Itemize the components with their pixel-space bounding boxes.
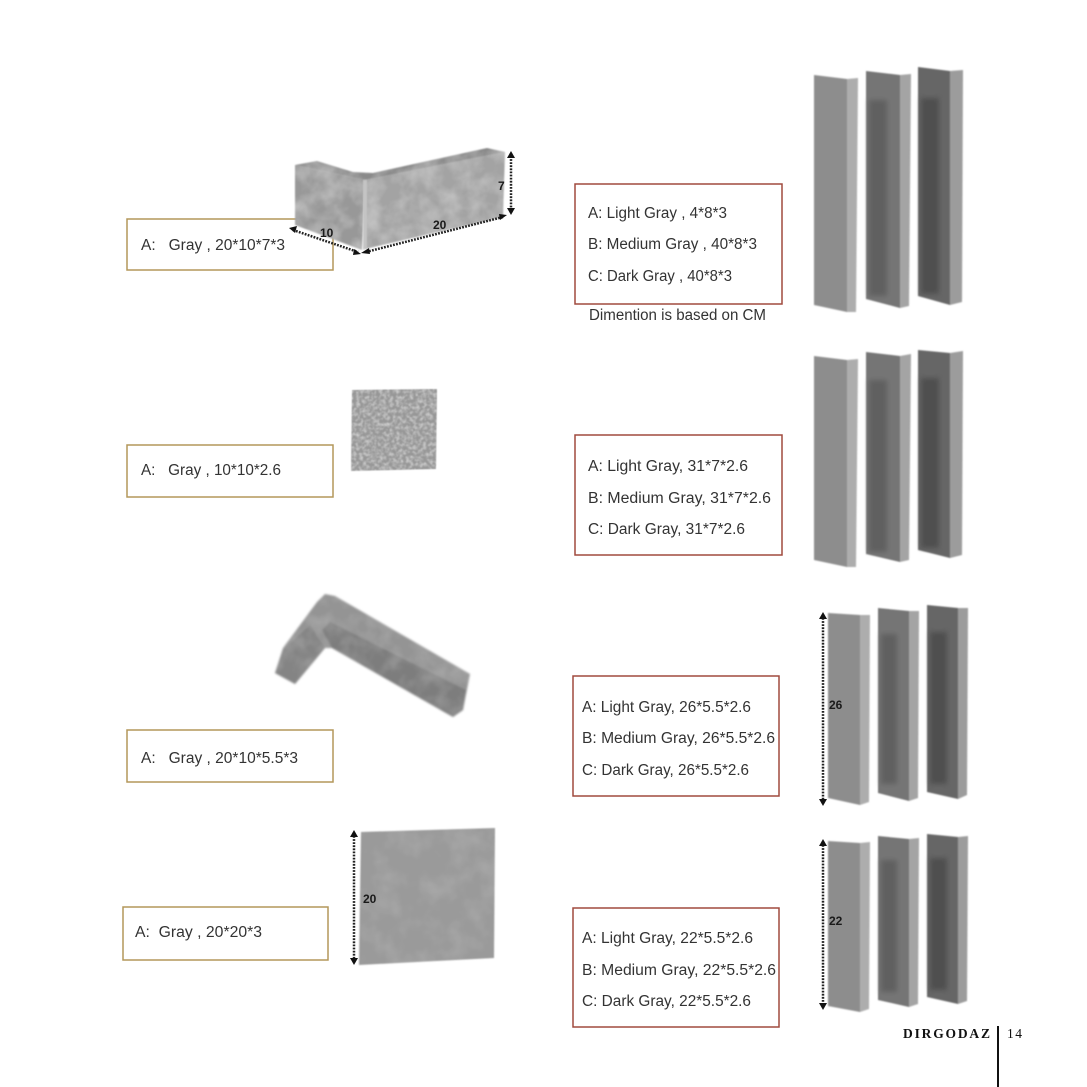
product photo: three bars 26cm with height marker: [819, 605, 968, 806]
label box: bars light medium dark 22*5.5*2.6: C: Dark Gray, 22*5.5*2.6: [582, 993, 751, 1010]
label box: bars light medium dark 26*5.5*2.6: C: Dark Gray, 26*5.5*2.6: [582, 762, 749, 779]
product photo: three bars 22cm with height marker: 22: [829, 914, 843, 928]
label box: gray tile 10*10*2.6: A: Gray , 10*10*2.6: [141, 462, 281, 479]
footer: brand name and page number: 14: [1007, 1026, 1022, 1041]
product photo: square tile 20cm with height marker: 20: [363, 892, 377, 906]
product photo: three bars 31cm: [814, 350, 963, 567]
label box: bars light medium dark 26*5.5*2.6: A: Light Gray, 26*5.5*2.6: [582, 699, 751, 716]
label box: bars light medium dark 26*5.5*2.6: [573, 676, 779, 796]
product photo: angled corner brick: [275, 594, 470, 717]
label box: bars light medium dark 31*7*2.6: A: Light Gray, 31*7*2.6: [588, 458, 748, 475]
label box: bars light medium dark 31*7*2.6: C: Dark Gray, 31*7*2.6: [588, 521, 745, 538]
label box: bars light medium dark 22*5.5*2.6: A: Light Gray, 22*5.5*2.6: [582, 930, 753, 947]
label box: gray corner 20*10*7*3: A: Gray , 20*10*7*3: [141, 237, 285, 254]
product photo: three bars 26cm with height marker: 26: [829, 698, 843, 712]
product photo: three bars 40cm: [814, 67, 963, 312]
product photo: corner brick with dimensions: 7: [498, 179, 505, 193]
label box: bars light medium dark 31*7*2.6: B: Medium Gray, 31*7*2.6: [588, 490, 771, 507]
label box: bars light medium dark 31*7*2.6: [575, 435, 782, 555]
label box: bars light medium dark 22*5.5*2.6: B: Medium Gray, 22*5.5*2.6: [582, 962, 776, 979]
label box: gray corner 20*10*7*3: [127, 219, 333, 270]
product photo: corner brick with dimensions: 10: [320, 226, 334, 240]
label box: bars light medium dark 26*5.5*2.6: B: Medium Gray, 26*5.5*2.6: [582, 730, 775, 747]
footer: brand name and page number: [903, 1026, 1022, 1087]
label box: gray tile 10*10*2.6: [127, 445, 333, 497]
label box: gray corner 20*10*5.5*3: A: Gray , 20*10*5.5*3: [141, 750, 298, 767]
label box: bars light medium dark 40*8*3: C: Dark Gray , 40*8*3: [588, 268, 732, 285]
label box: gray tile 20*20*3: [123, 907, 328, 960]
product photo: square tile 10cm: [351, 389, 437, 471]
label box: bars light medium dark 40*8*3: [575, 184, 782, 304]
label box: bars light medium dark 40*8*3: A: Light Gray , 4*8*3: [588, 205, 727, 222]
label box: gray corner 20*10*5.5*3: [127, 730, 333, 782]
label box: bars light medium dark 40*8*3: B: Medium Gray , 40*8*3: [588, 236, 757, 253]
product photo: corner brick with dimensions: [289, 148, 515, 255]
product photo: three bars 22cm with height marker: [819, 834, 968, 1012]
label box: gray tile 20*20*3: A: Gray , 20*20*3: [135, 924, 262, 941]
label box: bars light medium dark 22*5.5*2.6: [573, 908, 779, 1027]
product photo: square tile 20cm with height marker: [350, 828, 495, 965]
footer: brand name and page number: DIRGODAZ: [903, 1026, 990, 1041]
product photo: corner brick with dimensions: 20: [433, 218, 447, 232]
note: dimension unit: Dimention is based on CM: [589, 307, 766, 324]
